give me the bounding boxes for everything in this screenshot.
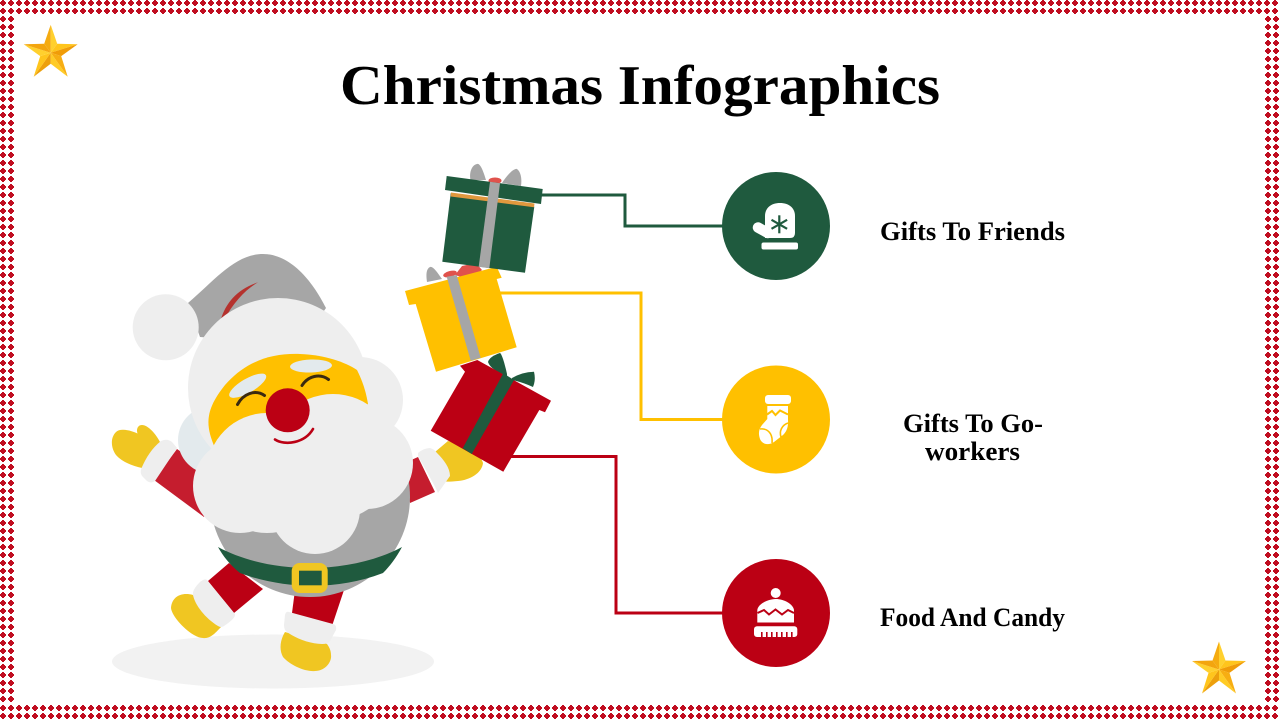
icon: gold star bottom right	[1192, 642, 1246, 694]
gift: green	[442, 164, 543, 273]
circle icon: stocking	[722, 366, 830, 474]
label: gifts to friends: Gifts To Friends	[880, 217, 1065, 246]
left leg	[171, 563, 263, 638]
connector: yellow	[498, 293, 724, 420]
title: Christmas Infographics	[340, 55, 940, 117]
icon: gold star top left	[24, 25, 78, 77]
ground shadow	[112, 634, 434, 688]
right leg	[281, 590, 344, 671]
circle icon: mitten	[722, 172, 830, 280]
circle icon: winter hat	[722, 559, 830, 667]
label: gifts to go-workers	[903, 409, 1043, 466]
connector: red	[510, 456, 724, 613]
left arm with mitten	[112, 425, 222, 517]
connector: green	[540, 195, 724, 226]
body with belt	[210, 397, 410, 597]
label: gifts to go-workers: workers	[925, 437, 1020, 466]
nose	[266, 388, 310, 432]
eyebrows	[226, 359, 332, 402]
beard	[193, 394, 413, 554]
santa hat	[133, 254, 326, 360]
label: gifts to go-workers: Gifts To Go-	[903, 409, 1043, 438]
gift: yellow	[405, 263, 517, 372]
fur around face	[188, 298, 403, 478]
gift: red	[431, 353, 551, 472]
face	[208, 354, 368, 475]
collar behind face	[178, 406, 246, 474]
label: food and candy: Food And Candy	[880, 603, 1065, 632]
eyes	[238, 376, 328, 404]
illustration: santa	[112, 254, 483, 688]
smile	[275, 429, 313, 443]
right arm with mitten	[400, 441, 483, 503]
